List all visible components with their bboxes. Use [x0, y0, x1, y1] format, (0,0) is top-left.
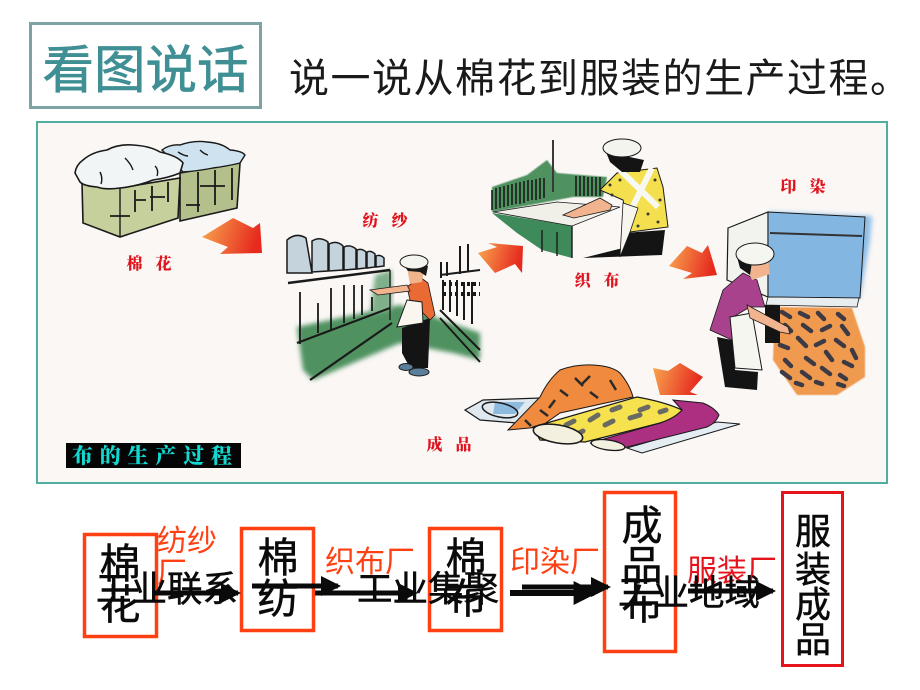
flow: cotton cloth box: 布 [446, 576, 486, 622]
flow: cotton box: 花 [100, 582, 140, 628]
arrow: finished to garment [688, 588, 773, 594]
arrow: cloth to finished lower [510, 590, 594, 596]
overlay text: industrial region: 工业地域 [618, 573, 760, 613]
flow: cotton cloth box: 棉 [446, 535, 486, 581]
arrow: yarn to cloth [252, 584, 338, 588]
panel: production illustration [37, 122, 887, 483]
arrow: weaving to printing [669, 245, 717, 279]
label: printing and dyeing: 印 染 [780, 177, 826, 196]
label: spinning mill [157, 525, 217, 590]
arrow: spinning to weaving [478, 243, 523, 273]
flow: finished cloth box: 布 [622, 582, 662, 628]
icon: cotton bales [75, 141, 245, 237]
label: finished goods: 成 品 [426, 435, 472, 454]
caption: fabric production process: 布的生产过程 [72, 444, 232, 468]
flow: cotton yarn box: 纺 [258, 576, 298, 622]
illustration: finished fabric rolls [465, 365, 740, 453]
flow: finished cloth box: 品 [622, 543, 662, 589]
arrow: cotton to spinning [202, 218, 262, 254]
flow: cotton box [84, 534, 156, 636]
illustration: spinning worker [287, 235, 480, 380]
illustration: printing worker [710, 212, 872, 395]
flow: finished cloth box: 成 [622, 503, 662, 549]
illustration: weaving worker [492, 139, 668, 258]
label: weaving: 织 布 [574, 271, 620, 290]
label: weaving mill: 织布厂 [325, 546, 415, 579]
flow: garment box: 品 [795, 619, 831, 660]
flow: cotton yarn box [242, 528, 314, 630]
flow: garment box: 成 [795, 584, 831, 625]
overlay text: industrial agglomeration: 工业集聚 [357, 569, 499, 609]
flow: garment box: 装 [795, 549, 831, 590]
label: dyeing mill: 印染厂 [510, 546, 600, 579]
label: spinning: 纺 纱 [362, 211, 409, 230]
subtitle: 说一说从棉花到服装的生产过程。 [289, 57, 910, 101]
arrow: printing to finished goods [653, 363, 703, 395]
label: garment factory: 服装厂 [687, 555, 777, 588]
arrow: cloth to finished [522, 584, 608, 590]
overlay text: industrial linkage: 工业联系 [96, 569, 238, 609]
label: spinning mill: 厂 [157, 557, 187, 590]
label: cotton: 棉 花 [126, 254, 172, 273]
label: spinning mill: 纺纱 [157, 525, 217, 558]
title box [30, 24, 260, 108]
title box: 看图说话 [42, 41, 249, 99]
flow: cotton yarn box: 棉 [258, 535, 298, 581]
flow: cotton cloth box [430, 528, 502, 630]
flow: finished cloth box [604, 492, 676, 652]
arrow: yarn to cloth lower [315, 590, 415, 596]
flow: cotton box: 棉 [100, 541, 140, 587]
flow: garment box [782, 492, 842, 666]
flow: garment box: 服 [795, 511, 831, 552]
arrow: cotton to yarn [153, 590, 238, 596]
